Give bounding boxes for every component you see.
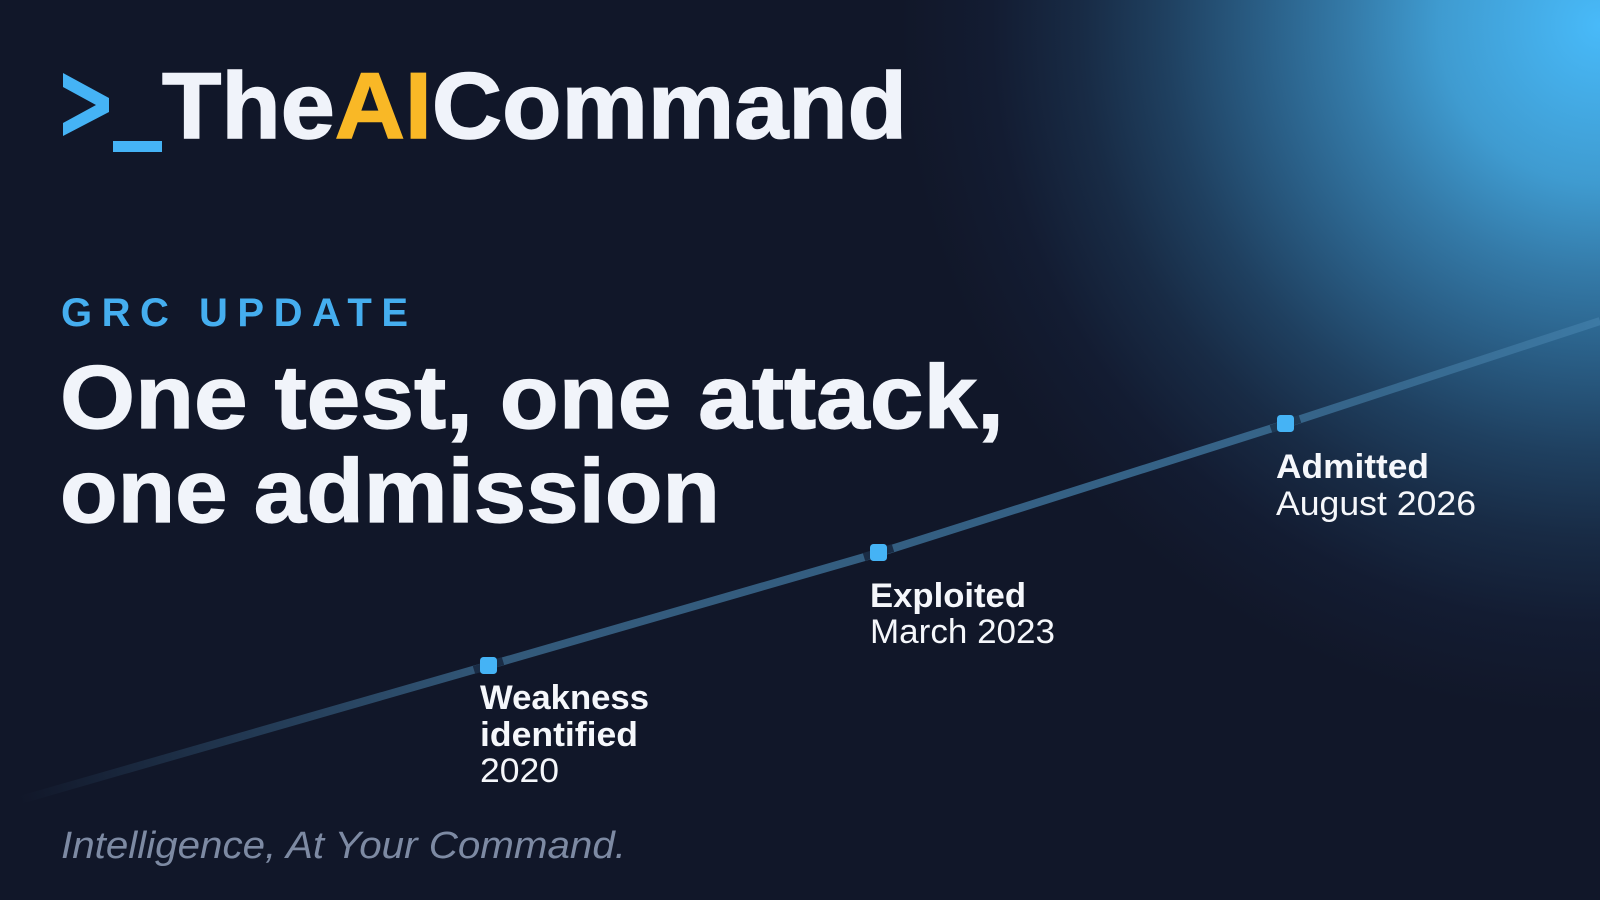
timeline — [20, 321, 1600, 800]
label: Exploited — [870, 577, 1026, 615]
marker — [864, 544, 893, 561]
marker — [474, 657, 503, 674]
label: identified — [480, 716, 638, 754]
label: March 2023 — [870, 613, 1055, 651]
background glow — [880, 0, 1600, 730]
label: Weakness — [480, 679, 649, 717]
label — [1276, 448, 1476, 523]
marker — [1271, 415, 1300, 432]
label: Admitted — [1276, 448, 1429, 486]
label: August 2026 — [1276, 485, 1476, 523]
tagline: Intelligence, At Your Command. — [61, 825, 626, 867]
logo wordmark: TheAICommand — [162, 53, 907, 158]
logo — [63, 53, 907, 158]
headline: One test, one attack, — [60, 348, 1004, 448]
milestone: weakness identified — [474, 657, 649, 790]
eyebrow: GRC UPDATE: GRC UPDATE — [61, 291, 408, 335]
label: 2020 — [480, 752, 559, 790]
label — [480, 679, 649, 790]
timeline line — [20, 321, 1600, 800]
milestone: admitted — [1271, 415, 1476, 523]
headline — [60, 348, 1004, 542]
headline: one admission — [60, 442, 720, 542]
label — [870, 577, 1055, 651]
milestone: exploited — [864, 544, 1055, 651]
icon: terminal prompt — [63, 73, 162, 152]
